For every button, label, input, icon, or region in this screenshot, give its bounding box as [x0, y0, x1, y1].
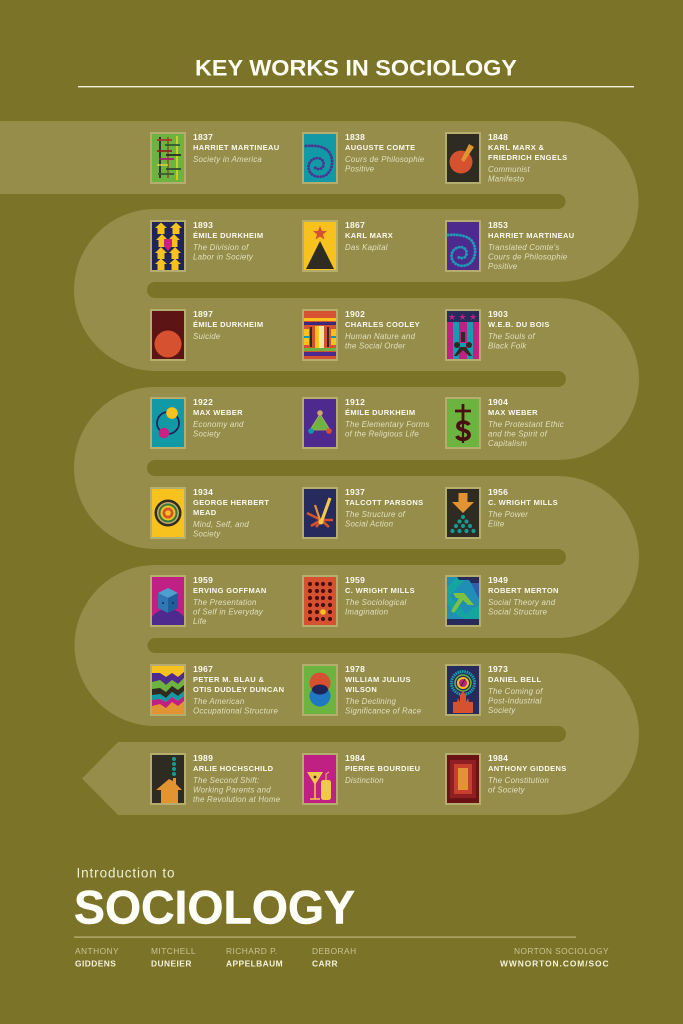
- card: 1967 Blau and Duncan: Occupational Structure: [193, 706, 278, 716]
- card: 1838 Auguste Comte: Cours de Philosophie: [345, 155, 425, 164]
- card: 1912 Emile Durkheim: [302, 397, 430, 449]
- publisher: [500, 946, 609, 968]
- publisher: WWNORTON.COM/SOC: [500, 958, 609, 968]
- card: 1984 Pierre Bourdieu: 1984: [345, 753, 365, 763]
- card: 1838 Auguste Comte: Positive: [345, 164, 375, 174]
- icon: house with clock dots: [150, 753, 186, 805]
- icon: cocktail and bottle: [302, 753, 338, 805]
- card: 1902 Charles Cooley: 1902: [345, 309, 365, 319]
- card: 1978 William Julius Wilson: Significance of Race: [345, 706, 422, 716]
- card: 1984 Anthony Giddens: [445, 753, 567, 805]
- card: 1959 Erving Goffman: of Self in Everyday: [193, 608, 264, 616]
- card: 1903 W.E.B. Du Bois: The Souls of: [488, 332, 536, 341]
- icon: linked circles: [150, 397, 186, 449]
- card: 1984 Anthony Giddens: 1984: [488, 753, 508, 763]
- card: 1904 Max Weber: and the Spirit of: [488, 430, 548, 438]
- card: 1897 Emile Durkheim: [150, 309, 263, 361]
- card: 1903 W.E.B. Du Bois: [445, 309, 550, 361]
- authors: DUNEIER: [151, 958, 192, 968]
- card: 1853 Harriet Martineau: Translated Comte's: [488, 243, 560, 252]
- card: 1949 Robert Merton: Social Structure: [488, 608, 548, 616]
- card: 1904 Max Weber: MAX WEBER: [488, 408, 538, 417]
- icon: grid of dots: [302, 575, 338, 627]
- card: 1984 Anthony Giddens: ANTHONY GIDDENS: [488, 764, 567, 773]
- card: 1838 Auguste Comte: [302, 132, 425, 184]
- card: 1989 Arlie Hochschild: Working Parents and: [193, 786, 271, 794]
- card: 1967 Blau and Duncan: [150, 664, 284, 716]
- card: 1978 William Julius Wilson: [302, 664, 422, 716]
- card: 1904 Max Weber: Capitalism: [488, 439, 527, 448]
- card: 1959 C. Wright Mills: Imagination: [345, 608, 389, 616]
- authors: CARR: [312, 958, 338, 968]
- card: 1838 Auguste Comte: 1838: [345, 132, 365, 142]
- card: 1904 Max Weber: 1904: [488, 397, 508, 407]
- card: 1897 Emile Durkheim: Suicide: [193, 332, 221, 341]
- card: 1893 Emile Durkheim: [150, 220, 263, 272]
- card: 1934 George Herbert Mead: Mind, Self, and: [193, 520, 249, 529]
- card: 1973 Daniel Bell: 1973: [488, 664, 508, 674]
- card: 1912 Emile Durkheim: 1912: [345, 397, 365, 407]
- icon: radial dial over factory: [445, 664, 481, 716]
- icon: yellow arrows: [150, 220, 186, 272]
- card: 1848 Marx and Engels: FRIEDRICH ENGELS: [488, 153, 568, 162]
- icon: stars, stripes and shackles: ★: [448, 312, 456, 322]
- card: 1989 Arlie Hochschild: 1989: [193, 753, 213, 763]
- card: 1949 Robert Merton: [445, 575, 559, 627]
- card: 1893 Emile Durkheim: ÉMILE DURKHEIM: [193, 231, 263, 240]
- icon: masked figure cube: [150, 575, 186, 627]
- card: 1867 Karl Marx: [302, 220, 393, 272]
- card: 1904 Max Weber: The Protestant Ethic: [488, 420, 564, 429]
- card: 1937 Talcott Parsons: [302, 487, 423, 539]
- authors: [75, 946, 357, 968]
- card: 1956 C. Wright Mills: [445, 487, 558, 539]
- card: 1922 Max Weber: MAX WEBER: [193, 408, 243, 417]
- card: 1978 William Julius Wilson: The Declining: [345, 697, 396, 706]
- card: 1922 Max Weber: 1922: [193, 397, 213, 407]
- card: 1959 Erving Goffman: [150, 575, 267, 627]
- card: 1959 Erving Goffman: 1959: [193, 575, 213, 585]
- card: 1973 Daniel Bell: Society: [488, 706, 516, 715]
- card: 1934 George Herbert Mead: MEAD: [193, 508, 217, 517]
- card: 1837 Harriet Martineau: 1837: [193, 132, 213, 142]
- card: 1897 Emile Durkheim: 1897: [193, 309, 213, 319]
- card: 1984 Pierre Bourdieu: Distinction: [345, 776, 384, 785]
- card: 1949 Robert Merton: 1949: [488, 575, 508, 585]
- card: 1934 George Herbert Mead: 1934: [193, 487, 213, 497]
- icon: striped pattern: [302, 309, 338, 361]
- icon: stars, stripes and shackles: ★: [469, 312, 477, 322]
- card: 1922 Max Weber: Economy and: [193, 420, 244, 429]
- card: 1934 George Herbert Mead: GEORGE HERBERT: [193, 498, 269, 507]
- card: 1978 William Julius Wilson: WILLIAM JULIUS: [345, 675, 411, 684]
- card: 1973 Daniel Bell: The Coming of: [488, 687, 543, 696]
- card: 1967 Blau and Duncan: PETER M. BLAU &: [193, 675, 264, 684]
- card: 1984 Anthony Giddens: of Society: [488, 786, 526, 794]
- card: 1848 Marx and Engels: Communist: [488, 165, 530, 174]
- card: 1902 Charles Cooley: [302, 309, 420, 361]
- card: 1959 C. Wright Mills: 1959: [345, 575, 365, 585]
- icon: zigzag strata: [150, 664, 186, 716]
- card: 1853 Harriet Martineau: Cours de Philosophie: [488, 252, 568, 262]
- icon: action burst: [302, 487, 338, 539]
- card: 1922 Max Weber: Society: [193, 430, 221, 438]
- card: 1989 Arlie Hochschild: ARLIE HOCHSCHILD: [193, 764, 274, 773]
- card: 1956 C. Wright Mills: The Power: [488, 510, 528, 519]
- card: 1937 Talcott Parsons: TALCOTT PARSONS: [345, 498, 423, 507]
- card: 1837 Harriet Martineau: [150, 132, 280, 184]
- authors: ANTHONY: [75, 946, 119, 956]
- authors: GIDDENS: [75, 958, 116, 968]
- card: 1973 Daniel Bell: DANIEL BELL: [488, 675, 541, 684]
- icon: overlapping circles: [302, 664, 338, 716]
- icon: triangle with circles: [302, 397, 338, 449]
- card: 1837 Harriet Martineau: Society in America: [193, 155, 262, 164]
- book title: Introduction to: [76, 866, 174, 880]
- icon: nested rectangles: [445, 753, 481, 805]
- card: 1893 Emile Durkheim: 1893: [193, 220, 213, 230]
- book title: SOCIOLOGY: [74, 880, 355, 934]
- card: 1989 Arlie Hochschild: [150, 753, 281, 805]
- card: 1984 Anthony Giddens: The Constitution: [488, 776, 549, 785]
- authors: RICHARD P.: [226, 946, 278, 956]
- publisher: NORTON SOCIOLOGY: [514, 946, 609, 956]
- icon: spiral on purple: [445, 220, 481, 272]
- card: 1867 Karl Marx: 1867: [345, 220, 365, 230]
- card: 1853 Harriet Martineau: Positive: [488, 262, 518, 271]
- card: 1937 Talcott Parsons: 1937: [345, 487, 365, 497]
- card: 1959 Erving Goffman: Life: [193, 617, 207, 626]
- card: 1959 C. Wright Mills: [302, 575, 415, 627]
- card: 1959 C. Wright Mills: The Sociological: [345, 598, 406, 607]
- card: 1959 C. Wright Mills: C. WRIGHT MILLS: [345, 586, 415, 595]
- card: 1978 William Julius Wilson: 1978: [345, 664, 365, 674]
- card: 1837 Harriet Martineau: HARRIET MARTINEAU: [193, 143, 280, 152]
- card: 1922 Max Weber: [150, 397, 244, 449]
- card: 1903 W.E.B. Du Bois: W.E.B. DU BOIS: [488, 320, 550, 329]
- card: 1904 Max Weber: [445, 397, 564, 449]
- icon: cross and dollar sign: [445, 397, 481, 449]
- card: 1853 Harriet Martineau: [445, 220, 575, 272]
- card: 1848 Marx and Engels: Manifesto: [488, 174, 525, 184]
- icon: target: [150, 487, 186, 539]
- icon: stars, stripes and shackles: ★: [458, 312, 467, 322]
- card: 1853 Harriet Martineau: 1853: [488, 220, 508, 230]
- card: 1937 Talcott Parsons: The Structure of: [345, 510, 406, 519]
- icon: sphere and horn: [445, 132, 481, 184]
- icon: crossed lines: [150, 132, 186, 184]
- card: 1848 Marx and Engels: [445, 132, 568, 184]
- icon: down arrow over pyramid of dots: [445, 487, 481, 539]
- card: 1867 Karl Marx: Das Kapital: [345, 243, 388, 252]
- card: 1967 Blau and Duncan: OTIS DUDLEY DUNCAN: [193, 685, 284, 694]
- card: 1934 George Herbert Mead: Society: [193, 530, 221, 538]
- card: 1973 Daniel Bell: [445, 664, 543, 716]
- card: 1956 C. Wright Mills: C. WRIGHT MILLS: [488, 498, 558, 507]
- card: 1902 Charles Cooley: the Social Order: [345, 342, 406, 350]
- icon: stars, stripes and shackles: [445, 309, 481, 361]
- card: 1912 Emile Durkheim: ÉMILE DURKHEIM: [345, 408, 415, 417]
- card: 1989 Arlie Hochschild: The Second Shift:: [193, 776, 259, 785]
- card: 1956 C. Wright Mills: Elite: [488, 520, 505, 528]
- card: 1989 Arlie Hochschild: the Revolution at Home: [193, 795, 281, 804]
- serpentine timeline band: [0, 158, 602, 815]
- icon: star over pyramid: [302, 220, 338, 272]
- card: 1949 Robert Merton: ROBERT MERTON: [488, 586, 559, 595]
- card: 1853 Harriet Martineau: HARRIET MARTINEAU: [488, 231, 575, 240]
- card: 1848 Marx and Engels: KARL MARX &: [488, 143, 545, 152]
- card: 1893 Emile Durkheim: Labor in Society: [193, 252, 254, 262]
- card: 1937 Talcott Parsons: Social Action: [345, 520, 394, 528]
- card: 1978 William Julius Wilson: WILSON: [345, 685, 377, 694]
- card: 1902 Charles Cooley: Human Nature and: [345, 332, 416, 341]
- card: 1903 W.E.B. Du Bois: 1903: [488, 309, 508, 319]
- card: 1838 Auguste Comte: AUGUSTE COMTE: [345, 143, 416, 152]
- card: 1949 Robert Merton: Social Theory and: [488, 598, 556, 607]
- authors: APPELBAUM: [226, 958, 283, 968]
- card: 1967 Blau and Duncan: The American: [193, 697, 245, 706]
- icon: circle on maroon: [150, 309, 186, 361]
- card: 1984 Pierre Bourdieu: PIERRE BOURDIEU: [345, 764, 420, 773]
- card: 1973 Daniel Bell: Post-Industrial: [488, 696, 542, 706]
- card: 1912 Emile Durkheim: The Elementary Forms: [345, 420, 430, 429]
- card: 1903 W.E.B. Du Bois: Black Folk: [488, 342, 527, 350]
- card: 1912 Emile Durkheim: of the Religious Life: [345, 430, 419, 438]
- card: 1959 Erving Goffman: ERVING GOFFMAN: [193, 586, 267, 595]
- icon: spiral on teal: [302, 132, 338, 184]
- icon: angular arrows: [445, 575, 481, 627]
- card: 1893 Emile Durkheim: The Division of: [193, 243, 249, 252]
- card: 1959 Erving Goffman: The Presentation: [193, 598, 257, 607]
- authors: MITCHELL: [151, 946, 196, 956]
- authors: DEBORAH: [312, 946, 357, 956]
- card: 1956 C. Wright Mills: 1956: [488, 487, 508, 497]
- card: 1934 George Herbert Mead: [150, 487, 269, 539]
- card: 1902 Charles Cooley: CHARLES COOLEY: [345, 320, 420, 329]
- card: 1848 Marx and Engels: 1848: [488, 132, 508, 142]
- card: 1867 Karl Marx: KARL MARX: [345, 231, 393, 240]
- title: KEY WORKS IN SOCIOLOGY: [195, 56, 517, 80]
- card: 1897 Emile Durkheim: ÉMILE DURKHEIM: [193, 320, 263, 329]
- card: 1984 Pierre Bourdieu: [302, 753, 420, 805]
- card: 1967 Blau and Duncan: 1967: [193, 664, 213, 674]
